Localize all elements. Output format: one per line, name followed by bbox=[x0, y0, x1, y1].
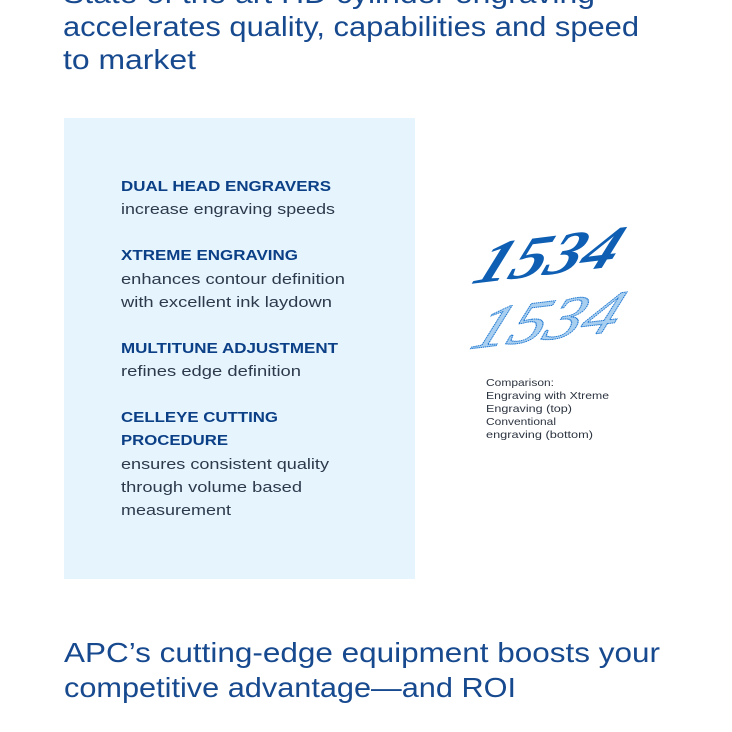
top heading: accelerates quality, capabilities and speed bbox=[63, 11, 639, 42]
feature: xtreme engraving: XTREME ENGRAVING bbox=[121, 248, 298, 264]
caption: comparison: Engraving with Xtreme bbox=[486, 390, 609, 402]
feature: celleye cutting procedure bbox=[121, 410, 330, 519]
feature: xtreme engraving: enhances contour definition bbox=[121, 271, 345, 288]
caption: comparison: Comparison: bbox=[486, 377, 554, 389]
feature: xtreme engraving bbox=[120, 248, 345, 311]
feature: dual head engravers: increase engraving speeds bbox=[121, 201, 335, 218]
panel: engraving features bbox=[64, 118, 415, 579]
feature: dual head engravers bbox=[121, 179, 335, 218]
feature: xtreme engraving: with excellent ink laydown bbox=[120, 294, 332, 311]
bottom heading: competitive advantage—and ROI bbox=[64, 672, 516, 703]
feature: multitune adjustment: refines edge definition bbox=[121, 363, 301, 380]
bottom heading: APC’s cutting-edge equipment boosts your bbox=[64, 637, 660, 668]
bottom heading bbox=[64, 637, 660, 703]
caption: comparison: Engraving (top) bbox=[486, 403, 572, 415]
caption: comparison: Conventional bbox=[486, 416, 556, 428]
feature: celleye cutting procedure: ensures consistent quality bbox=[121, 456, 330, 473]
feature: celleye cutting procedure: CELLEYE CUTTING bbox=[121, 410, 278, 426]
top heading bbox=[63, 0, 639, 75]
feature: celleye cutting procedure: through volume based bbox=[121, 479, 302, 496]
feature: celleye cutting procedure: measurement bbox=[121, 502, 232, 519]
feature: multitune adjustment: MULTITUNE ADJUSTMENT bbox=[121, 341, 338, 357]
caption: comparison: engraving (bottom) bbox=[486, 429, 593, 441]
feature: dual head engravers: DUAL HEAD ENGRAVERS bbox=[121, 179, 331, 195]
caption: comparison bbox=[486, 377, 609, 441]
feature: celleye cutting procedure: PROCEDURE bbox=[121, 433, 228, 449]
feature: multitune adjustment bbox=[121, 341, 338, 380]
top heading: to market bbox=[63, 44, 196, 75]
